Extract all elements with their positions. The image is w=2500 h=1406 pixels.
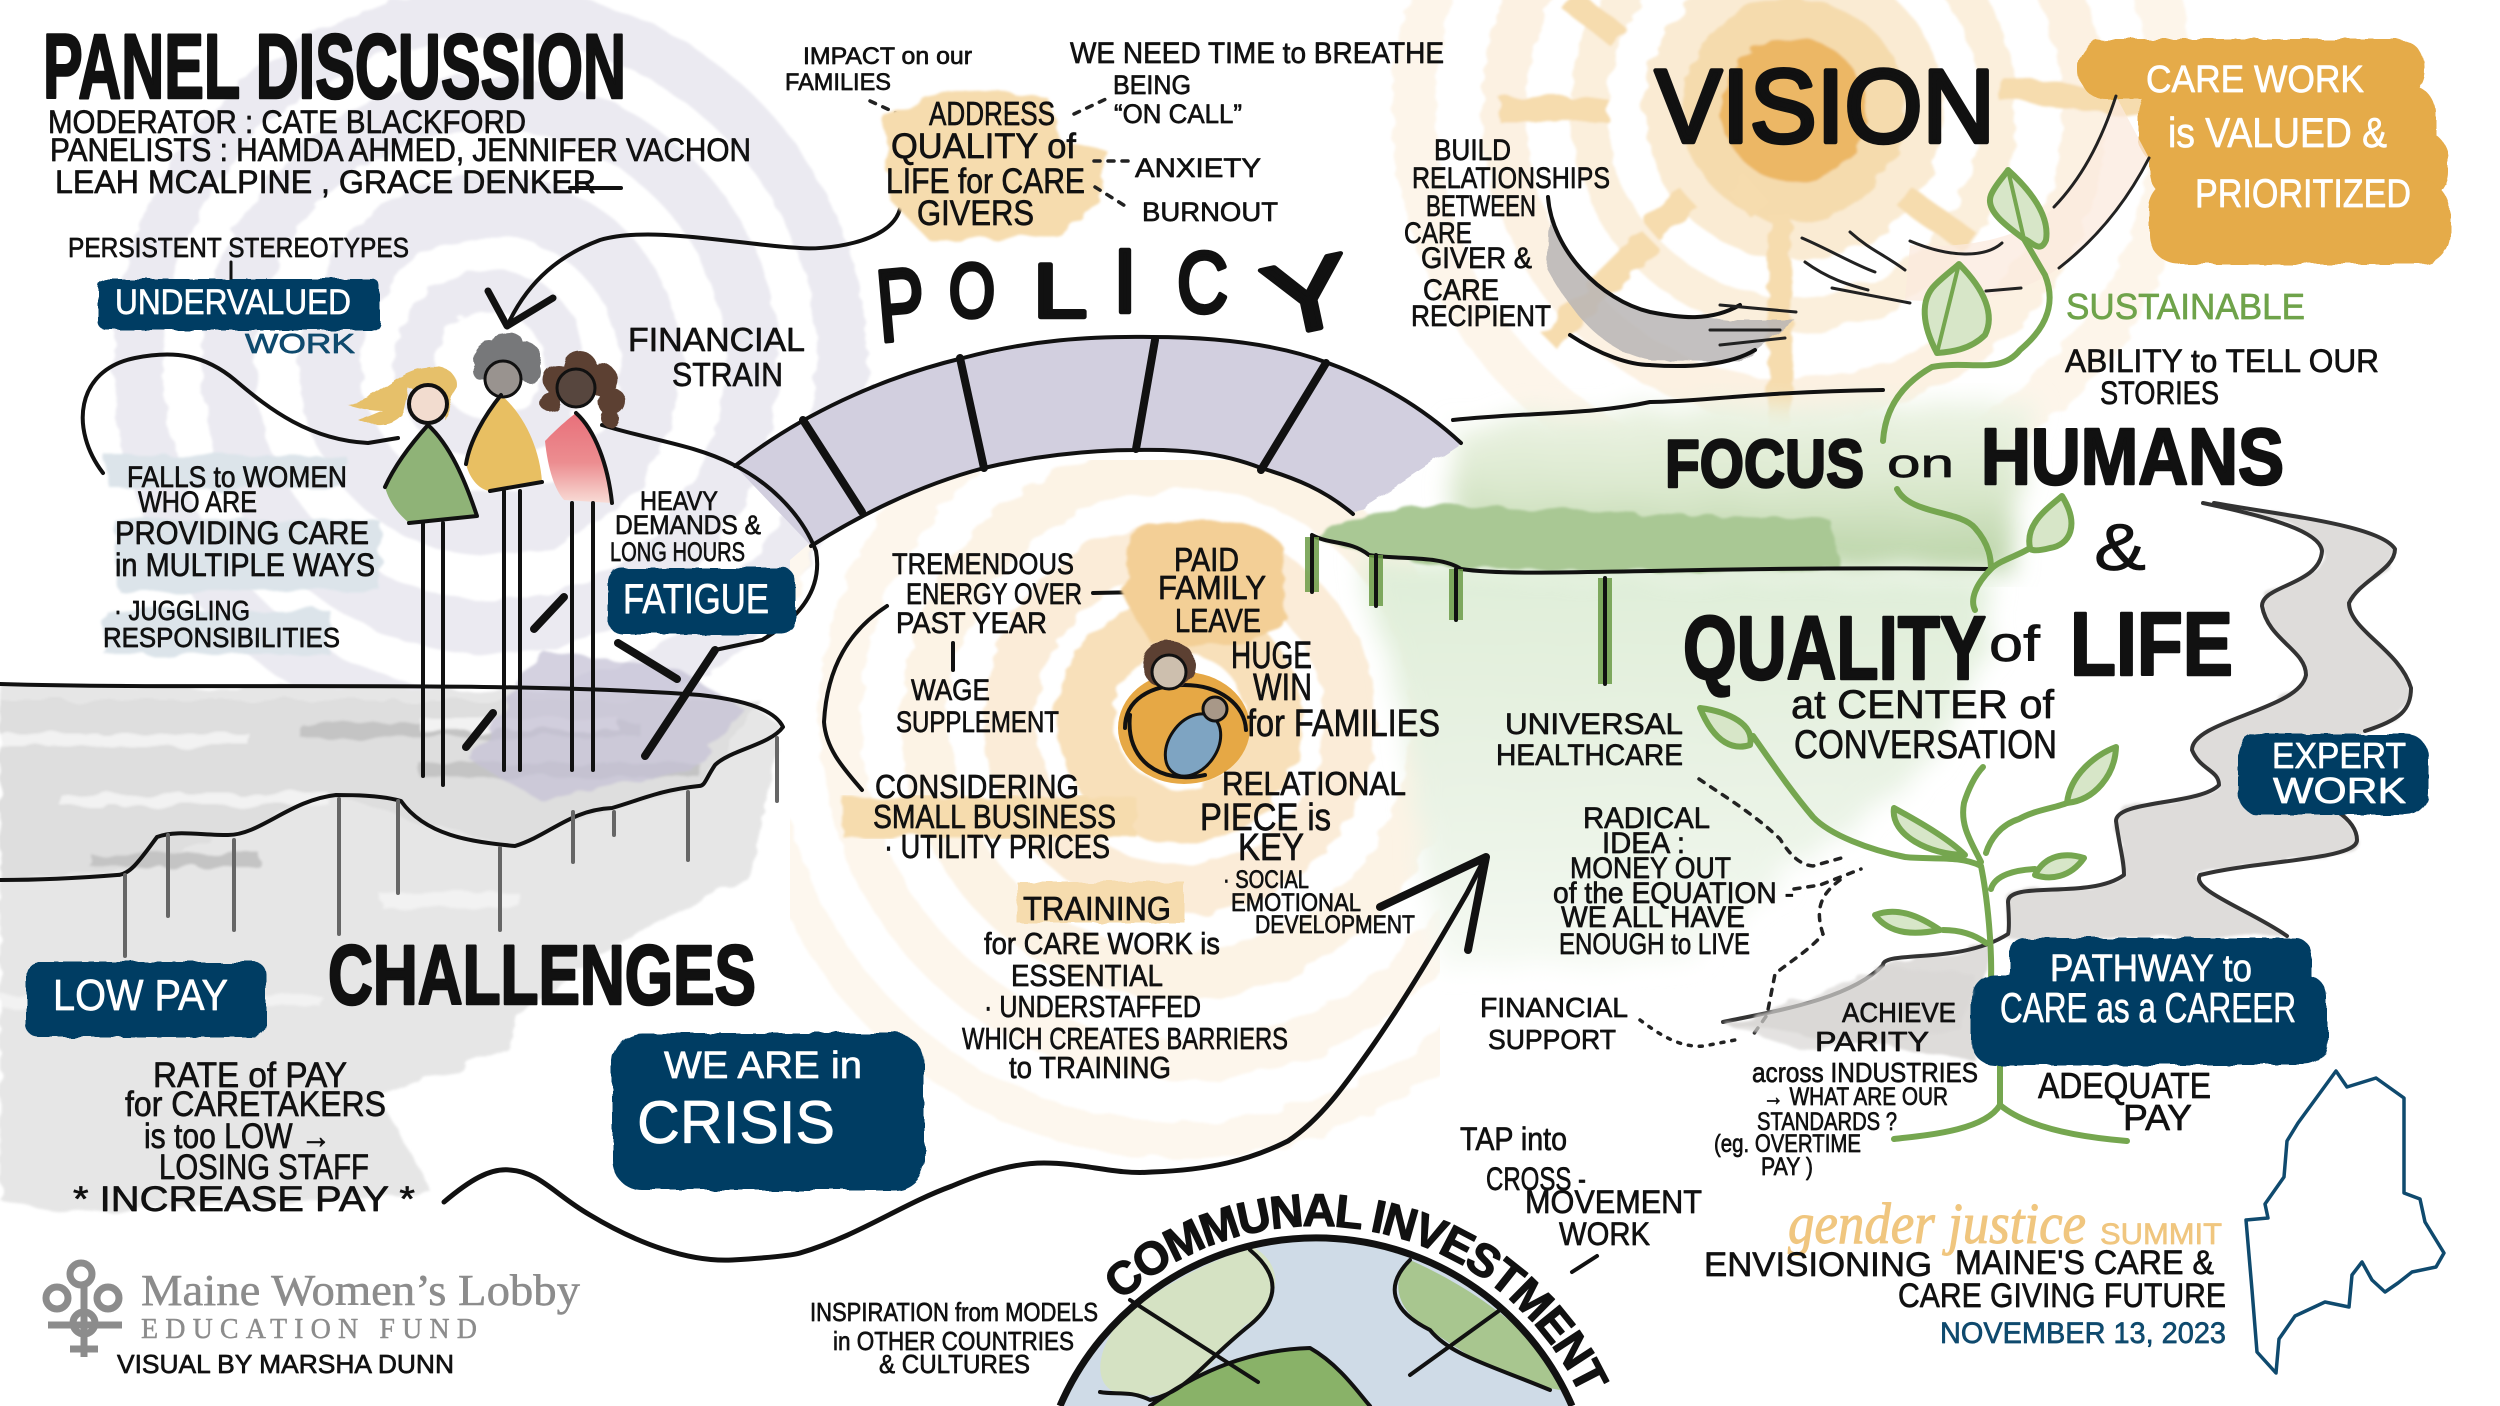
badge: care work valued: PRIORITIZED — [2195, 172, 2411, 216]
hands: reaching arm right — [1802, 96, 2149, 303]
badge: pathway to care as a career — [1972, 938, 2327, 1065]
text: summit details: NOVEMBER 13, 2023 — [1940, 1317, 2226, 1350]
text: achieve parity: PAY ) — [1761, 1153, 1813, 1181]
text: persistent stereotypes: PERSISTENT STEREOTYPES — [68, 232, 409, 263]
title: PANEL DISCUSSION — [43, 16, 626, 118]
text: rate of pay: RATE of PAY — [153, 1056, 347, 1095]
text: universal health care: HEALTHCARE — [1496, 739, 1683, 772]
text: stressors: BEING — [1113, 70, 1191, 100]
heading: quality of life: of — [1989, 616, 2040, 672]
text: tremendous energy: WAGE — [911, 674, 990, 707]
heading: quality of life: CONVERSATION — [1794, 723, 2057, 767]
text: training — [962, 882, 1288, 1085]
badge: pathway to care as a career: PATHWAY to — [2050, 948, 2252, 990]
text: summit details: CARE GIVING FUTURE — [1898, 1277, 2226, 1315]
text: build relationships: RECIPIENT — [1411, 300, 1551, 333]
text: relational piece — [1200, 765, 1415, 939]
text: tap into cross-movement work: MOVEMENT — [1525, 1184, 1702, 1220]
arc connector — [824, 606, 887, 790]
text: radical idea: of the EQUATION - — [1553, 877, 1794, 910]
heading: quality of life: LIFE — [2070, 595, 2233, 695]
heading: communal investment: COMMUNAL INVESTMENT — [1107, 1194, 1610, 1388]
callout: small business: SMALL BUSINESS — [873, 798, 1116, 835]
text: radical idea: WE ALL HAVE — [1561, 901, 1745, 934]
figure: mother and baby — [1118, 641, 1250, 787]
text: falls to women: PROVIDING CARE — [115, 515, 369, 551]
text: rate of pay: LOSING STAFF — [159, 1148, 369, 1187]
callout: paid family leave: FAMILY — [1158, 569, 1266, 606]
callout: paid family leave — [1125, 519, 1288, 643]
text: training: ESSENTIAL — [1011, 958, 1163, 993]
text: training: TRAINING — [1023, 890, 1171, 927]
text: adequate pay: PAY — [2123, 1097, 2192, 1138]
cliff: challenges ground outline — [0, 597, 783, 956]
callout: address quality of life: GIVERS — [917, 194, 1034, 233]
text: rate of pay: is too LOW → — [144, 1117, 331, 1156]
speech outline: fatigue — [602, 425, 817, 650]
callout: small business — [843, 768, 1136, 865]
heading: policy: I — [1113, 232, 1137, 332]
globe — [1060, 1238, 1572, 1406]
text: falls to women: FALLS to WOMEN — [127, 461, 347, 494]
text: radical idea: ENOUGH to LIVE — [1559, 928, 1750, 961]
logo: Maine Women's Lobby — [46, 1263, 580, 1357]
plateau: green ground outline — [1312, 390, 1991, 684]
badge: undervalued work: WORK — [245, 328, 355, 359]
text: achieve parity: ACHIEVE — [1842, 997, 1956, 1028]
text: adequate pay: ADEQUATE — [2038, 1065, 2211, 1106]
text: falls to women: RESPONSIBILITIES — [103, 622, 340, 653]
badge: expert work — [2238, 734, 2428, 815]
text: financial support — [1480, 992, 1628, 1055]
text: huge win for families: for FAMILIES — [1247, 703, 1440, 745]
text: huge win for families: WIN — [1253, 667, 1312, 709]
text: build relationships: CARE — [1423, 274, 1499, 307]
arrow: challenges to policy — [444, 857, 1486, 1260]
text: rate of pay: * INCREASE PAY * — [73, 1180, 415, 1219]
heading: policy: C — [1177, 235, 1228, 331]
background: grey cliff wash — [0, 650, 783, 1213]
callout: small business: CONSIDERING — [875, 768, 1079, 805]
text: stressors: ANXIETY — [1135, 153, 1261, 183]
text: relational piece: DEVELOPMENT — [1255, 911, 1415, 939]
text: huge win for families — [1231, 635, 1440, 745]
hands: reaching arm left — [1548, 197, 1796, 366]
badge: care work valued: is VALUED & — [2168, 109, 2387, 156]
text: tap into cross-movement work — [1460, 1121, 1702, 1272]
logo: Maine Women's Lobby: Maine Women’s Lobby — [141, 1266, 580, 1315]
text: achieve parity: → WHAT ARE OUR — [1763, 1083, 1948, 1111]
text: build relationships: BUILD — [1434, 134, 1511, 167]
text: achieve parity: (eg. OVERTIME — [1714, 1130, 1861, 1158]
plant: lower stem with leaves — [1700, 708, 2127, 1141]
text: falls to women: WHO ARE — [138, 486, 257, 519]
text: financial support: SUPPORT — [1488, 1024, 1616, 1055]
text: radical idea: IDEA : — [1602, 827, 1685, 860]
text: tremendous energy: SUPPLEMENT — [896, 706, 1059, 739]
badge: care work valued — [2078, 39, 2449, 264]
text: ability to tell our stories: STORIES — [2100, 375, 2219, 411]
text: tremendous energy: TREMENDOUS — [892, 548, 1074, 581]
text: universal health care: UNIVERSAL — [1505, 708, 1683, 741]
background: sun — [1414, 0, 2174, 490]
text: summit details: ENVISIONING — [1704, 1246, 1932, 1284]
text: stressors — [1074, 70, 1278, 227]
text: achieve parity: STANDARDS ? — [1757, 1108, 1897, 1136]
text: tremendous energy: PAST YEAR — [896, 607, 1047, 640]
moderator and panelists: LEAH MCALPINE , GRACE DENKER — [55, 164, 596, 200]
callout: address quality of life — [884, 92, 1106, 241]
text: heavy demands: HEAVY — [640, 486, 718, 516]
text: relational piece: RELATIONAL — [1222, 765, 1406, 802]
heading: policy — [872, 232, 1362, 364]
heading: focus on humans: & — [2094, 510, 2146, 584]
plant: mid vine — [1897, 489, 2071, 610]
callout: address quality of life: ADDRESS — [929, 95, 1055, 132]
badge: undervalued work: UNDERVALUED — [115, 283, 351, 322]
text: achieve parity: across INDUSTRIES — [1752, 1057, 1978, 1088]
text: huge win for families: HUGE — [1231, 635, 1312, 677]
text: heavy demands — [610, 486, 761, 567]
moderator and panelists: PANELISTS : HAMDA AHMED, JENNIFER VACHON — [50, 132, 751, 168]
heading: policy: Y — [1253, 232, 1362, 360]
bridge: policy arch — [735, 337, 1461, 546]
text: relational piece: PIECE is — [1200, 797, 1331, 839]
heading: policy: P — [872, 246, 930, 364]
text: falls to women: · JUGGLING — [114, 595, 250, 626]
heading: focus on humans — [1665, 412, 2284, 584]
badge: low pay: LOW PAY — [53, 971, 228, 1020]
heading: focus on humans: HUMANS — [1981, 412, 2284, 501]
text: training: for CARE WORK is — [984, 926, 1220, 961]
text: build relationships: GIVER & — [1421, 242, 1532, 275]
text: impact on families — [785, 43, 972, 118]
text: rate of pay — [73, 1056, 415, 1219]
text: radical idea — [1553, 802, 1794, 961]
text: rate of pay: for CARETAKERS — [125, 1085, 386, 1124]
badge: care work valued: CARE WORK — [2146, 59, 2364, 101]
badge: fatigue: FATIGUE — [623, 575, 769, 622]
badge: we are in crisis: WE ARE in — [664, 1045, 862, 1087]
text: build relationships — [1404, 134, 1610, 333]
text: inspiration from models: in OTHER COUNTRIES — [833, 1326, 1074, 1356]
heading: quality of life: at CENTER of — [1791, 683, 2055, 727]
moderator and panelists — [48, 104, 751, 200]
arrow: quality of life to people — [488, 209, 900, 326]
text: impact on families: IMPACT on our — [803, 43, 972, 70]
text: impact on families: FAMILIES — [785, 69, 891, 96]
text: ability to tell our stories — [2065, 343, 2379, 411]
heading: sustainable: SUSTAINABLE — [2066, 286, 2305, 327]
text: adequate pay — [2038, 1065, 2211, 1138]
text: heavy demands: LONG HOURS — [610, 537, 745, 567]
text: build relationships: CARE — [1404, 217, 1472, 250]
background: lilac swirl — [138, 13, 842, 717]
text: relational piece: KEY — [1238, 827, 1304, 869]
figure: woman with grey hair — [466, 331, 542, 770]
badge: fatigue — [608, 568, 796, 634]
text: summit details: gender justice — [1788, 1191, 2086, 1256]
credit: VISUAL BY MARSHA DUNN — [117, 1349, 454, 1379]
callout: paid family leave: PAID — [1174, 541, 1239, 578]
callout: small business: · UTILITY PRICES — [884, 828, 1110, 865]
text: build relationships: RELATIONSHIPS — [1412, 162, 1610, 195]
text: falls to women — [103, 455, 380, 655]
text: radical idea: RADICAL — [1583, 802, 1710, 835]
text: radical idea: MONEY OUT — [1570, 852, 1731, 885]
heading: quality of life — [1683, 595, 2233, 767]
callout: paid family leave: LEAVE — [1175, 602, 1261, 639]
speech outline: falls to women — [83, 354, 398, 473]
background: green plateau wash — [1312, 400, 2030, 970]
text: tremendous energy — [892, 548, 1144, 739]
heading: challenges: CHALLENGES — [328, 928, 756, 1022]
text: training: to TRAINING — [1009, 1050, 1171, 1085]
logo: Maine Women's Lobby: EDUCATION FUND — [141, 1314, 477, 1345]
text: we need time to breathe: WE NEED TIME to BREATHE — [1070, 37, 1444, 70]
text: summit details — [1704, 1191, 2226, 1350]
text: training: · UNDERSTAFFED — [984, 989, 1201, 1024]
text: inspiration from models — [810, 1297, 1098, 1379]
text: tremendous energy: ENERGY OVER — [906, 578, 1082, 611]
moderator and panelists: MODERATOR : CATE BLACKFORD — [48, 104, 526, 140]
text: tap into cross-movement work: CROSS - — [1486, 1161, 1586, 1197]
text: inspiration from models: INSPIRATION from MODELS — [810, 1297, 1098, 1327]
badge: undervalued work — [98, 279, 380, 359]
text: achieve parity — [1714, 965, 1978, 1181]
text: relational piece: EMOTIONAL — [1231, 889, 1361, 917]
heading: policy: O — [949, 249, 995, 334]
text: ability to tell our stories: ABILITY to TELL OUR — [2065, 343, 2379, 379]
text: summit details: SUMMIT — [2100, 1218, 2222, 1251]
heading: vision: VISION — [1655, 49, 1995, 165]
text: stressors: “ON CALL” — [1114, 99, 1242, 129]
figure: woman with blonde hair — [347, 367, 477, 785]
text: falls to women: in MULTIPLE WAYS — [115, 547, 375, 583]
badge: expert work: WORK — [2273, 770, 2406, 811]
text: relational piece: · SOCIAL — [1223, 866, 1309, 894]
heading: focus on humans: on — [1887, 442, 1954, 486]
badge: low pay — [26, 962, 266, 1037]
text: training: WHICH CREATES BARRIERS — [962, 1021, 1288, 1056]
background: policy orange swirl — [790, 460, 1440, 1160]
river: pathway ribbon — [1723, 503, 2411, 1060]
heading: quality of life: QUALITY — [1683, 599, 1986, 699]
callout: address quality of life: LIFE for CARE — [886, 162, 1085, 201]
heading: focus on humans: FOCUS — [1665, 426, 1864, 502]
text: achieve parity: PARITY — [1815, 1026, 1929, 1057]
badge: we are in crisis: CRISIS — [637, 1089, 835, 1156]
dotted connectors — [1640, 779, 1861, 1046]
map: Maine outline — [2246, 1071, 2444, 1373]
text: heavy demands: DEMANDS & — [615, 510, 761, 540]
figure: woman with dark curly hair — [540, 351, 626, 770]
text: financial strain: STRAIN — [672, 356, 783, 393]
text: universal health care — [1496, 708, 1683, 772]
heading: policy: L — [1033, 249, 1087, 334]
text: build relationships: BETWEEN — [1426, 190, 1536, 223]
text: financial support: FINANCIAL — [1480, 992, 1628, 1023]
badge: expert work: EXPERT — [2272, 735, 2406, 776]
text: summit details: MAINE'S CARE & — [1955, 1244, 2214, 1282]
text: inspiration from models: & CULTURES — [879, 1349, 1030, 1379]
text: financial strain — [628, 321, 805, 393]
text: financial strain: FINANCIAL — [628, 321, 805, 358]
plant: upper vine with leaves — [1883, 170, 2050, 441]
text: tap into cross-movement work: TAP into — [1460, 1121, 1567, 1157]
badge: we are in crisis — [612, 1033, 924, 1190]
text: stressors: BURNOUT — [1142, 197, 1278, 227]
callout: address quality of life: QUALITY of — [891, 127, 1076, 166]
text: tap into cross-movement work: WORK — [1559, 1216, 1650, 1252]
badge: pathway to care as a career: CARE as a CAREER — [2000, 984, 2296, 1031]
